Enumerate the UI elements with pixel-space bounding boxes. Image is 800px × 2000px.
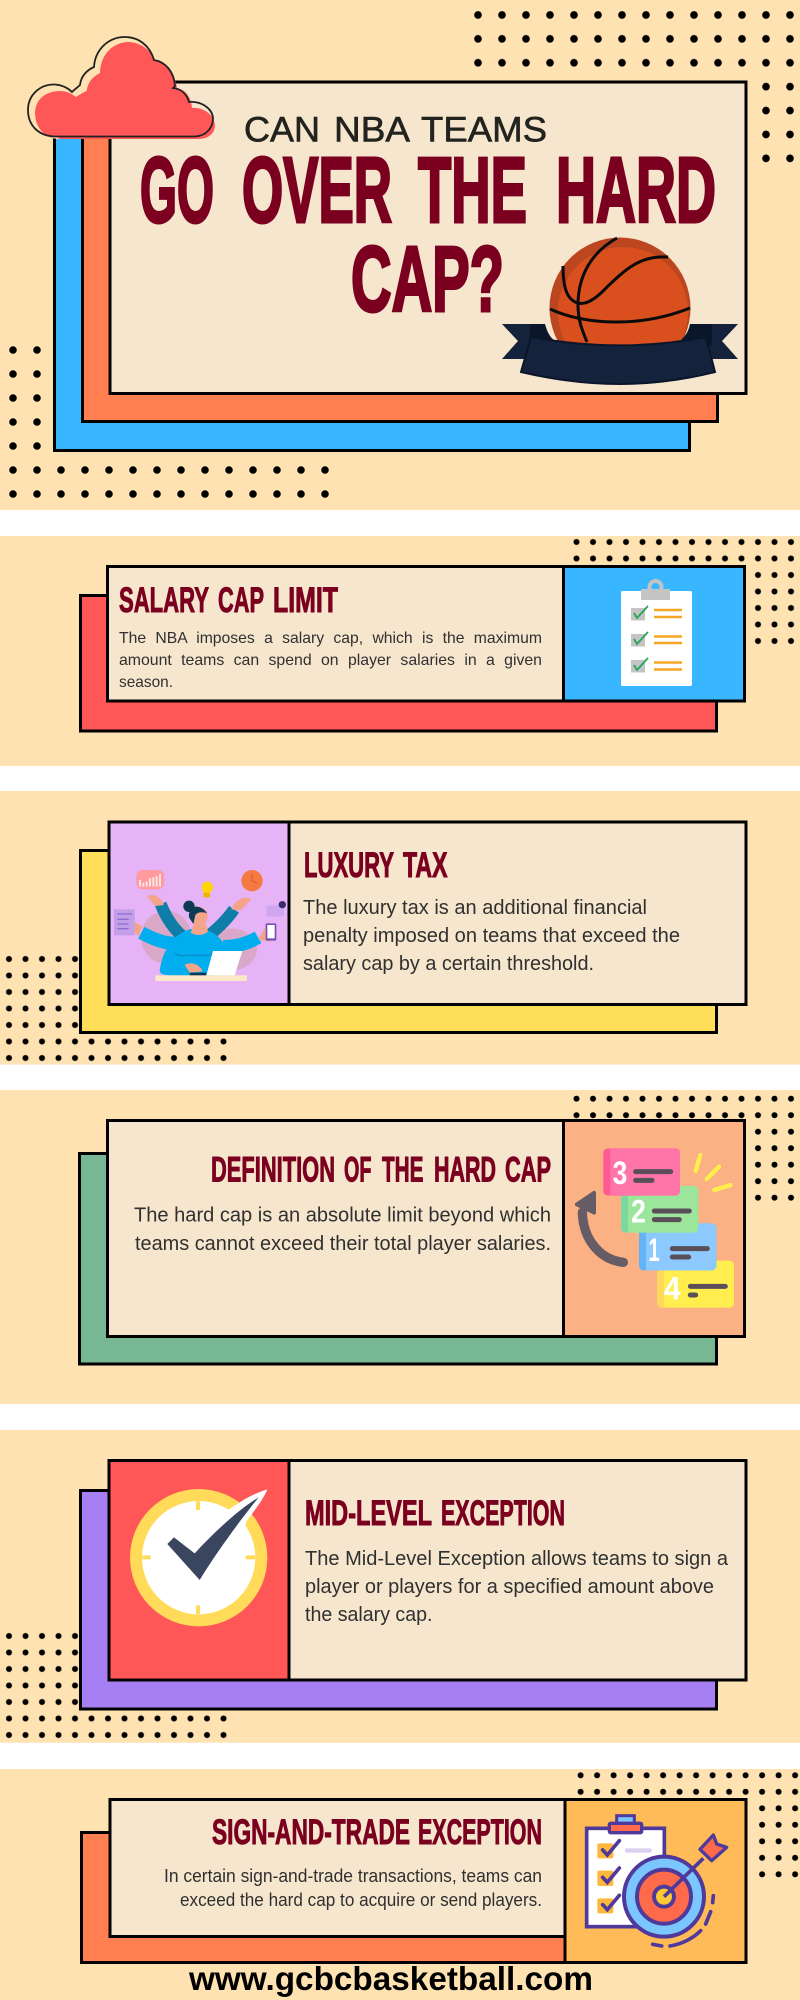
heading: HARD	[434, 1150, 496, 1190]
section: salary cap limit	[0, 534, 800, 766]
heading: LIMIT	[273, 581, 338, 620]
heading: OF	[344, 1150, 372, 1190]
heading	[211, 1150, 551, 1190]
title	[140, 138, 716, 331]
subtitle: TEAMS	[421, 110, 547, 150]
body text: The NBA imposes a salary cap, which is the maximum	[119, 630, 542, 647]
icon: clipboard checklist	[621, 581, 692, 686]
body text: exceed the hard cap to acquire or send players.	[180, 1890, 542, 1910]
icon: clipboard and target	[587, 1816, 727, 1946]
subtitle: CAN	[244, 110, 320, 150]
body text: penalty imposed on teams that exceed the	[303, 925, 680, 947]
icon: basketball with ribbon	[502, 238, 738, 384]
body text: The luxury tax is an additional financial	[303, 897, 647, 919]
icon: numbered steps	[575, 1148, 734, 1308]
heading: SALARY	[119, 581, 209, 620]
header panel	[0, 0, 800, 510]
subtitle: NBA	[334, 110, 411, 150]
heading: EXCEPTION	[418, 1813, 542, 1852]
heading: EXCEPTION	[441, 1494, 565, 1533]
icon: numbered steps: 2	[631, 1192, 646, 1229]
heading: SIGN-AND-TRADE	[212, 1813, 410, 1852]
section: definition of the hard cap	[0, 1090, 800, 1404]
body text	[164, 1866, 542, 1910]
body text: player or players for a specified amount above	[305, 1576, 714, 1598]
body text: the salary cap.	[305, 1604, 432, 1626]
body text: teams cannot exceed their total player salaries.	[135, 1233, 551, 1255]
icon: numbered steps: 1	[648, 1231, 660, 1268]
title: THE	[418, 138, 527, 242]
body text: amount teams can spend on player salaries in a given	[119, 652, 542, 669]
footer website url: www.gcbcbasketball.com	[188, 1960, 593, 1997]
subtitle	[244, 110, 547, 150]
body text	[134, 1204, 551, 1255]
heading: DEFINITION	[211, 1150, 335, 1190]
body text	[303, 897, 680, 975]
icon: numbered steps: 4	[664, 1269, 681, 1306]
heading: THE	[382, 1150, 424, 1190]
heading: LUXURY	[304, 846, 394, 885]
title: CAP?	[351, 227, 504, 331]
title: OVER	[242, 138, 392, 242]
body text	[305, 1548, 729, 1626]
heading: CAP	[218, 581, 264, 620]
body text: In certain sign-and-trade transactions, teams can	[164, 1866, 542, 1886]
section: mid-level exception	[0, 1430, 800, 1743]
icon: cloud	[28, 37, 215, 139]
body text	[119, 630, 542, 691]
body text: The Mid-Level Exception allows teams to sign a	[305, 1548, 729, 1570]
heading: CAP	[505, 1150, 551, 1190]
body text: salary cap by a certain threshold.	[303, 953, 594, 975]
body text: season.	[119, 674, 173, 691]
body text: The hard cap is an absolute limit beyond which	[134, 1204, 551, 1226]
icon: clock with check mark	[130, 1489, 267, 1626]
heading: MID-LEVEL	[305, 1494, 432, 1533]
heading	[119, 581, 338, 620]
illustration: multitasking woman	[114, 870, 286, 981]
heading: TAX	[403, 846, 448, 885]
icon: numbered steps: 3	[613, 1154, 627, 1191]
section: sign-and-trade exception	[0, 1767, 800, 2000]
title: GO	[140, 138, 214, 242]
section: luxury tax	[0, 791, 800, 1064]
